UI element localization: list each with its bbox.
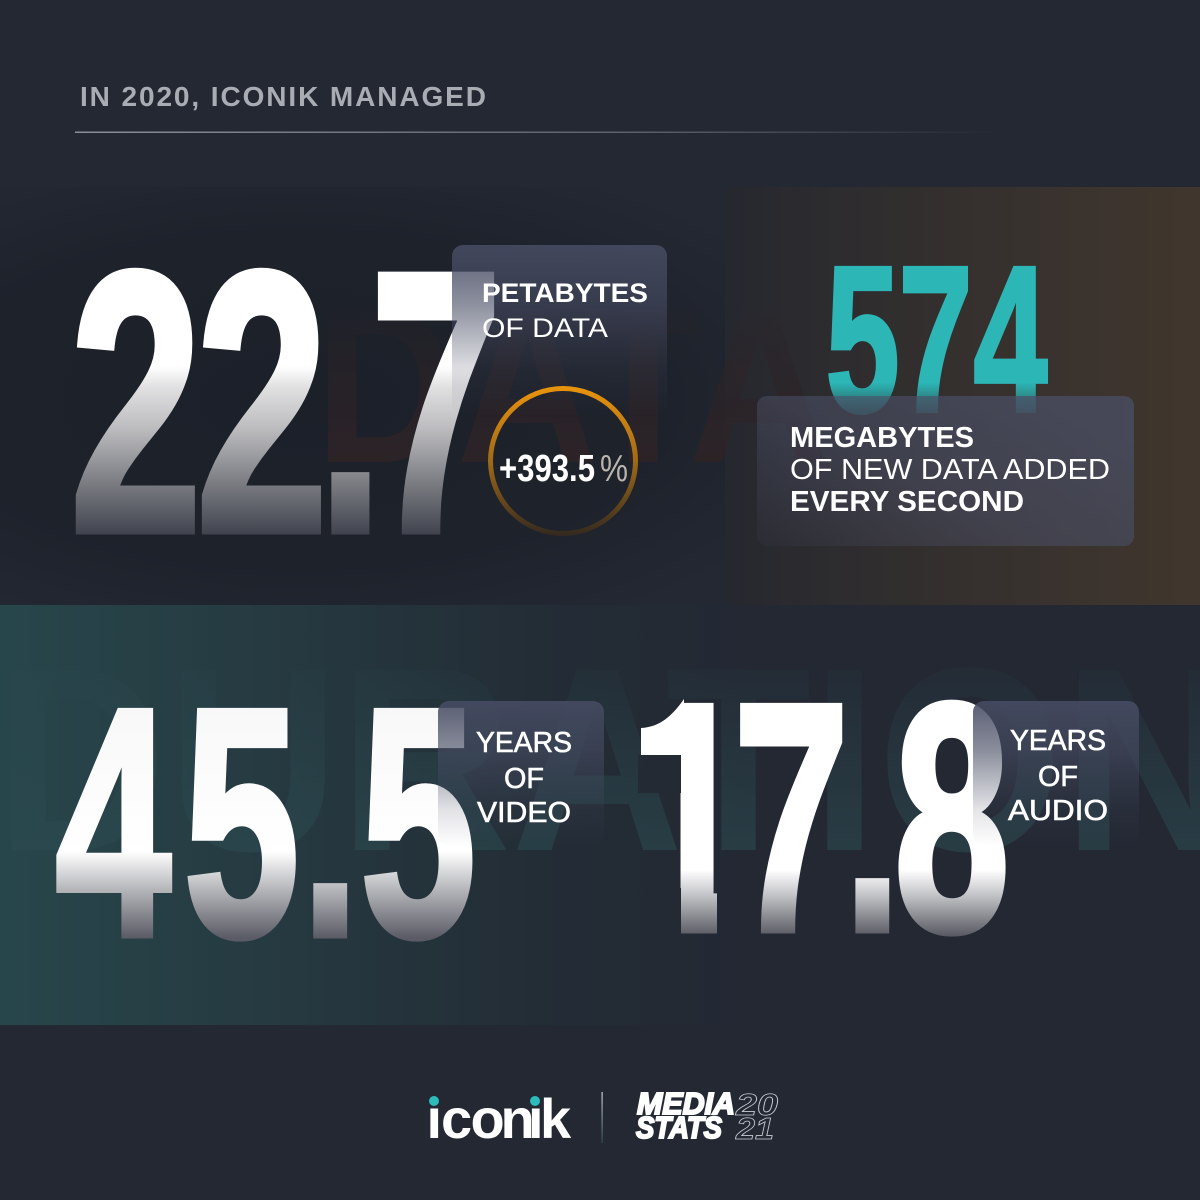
label: megabytes of new data added every second: MEGABYTES	[790, 422, 974, 454]
stat: 17.8 years of audio	[632, 636, 1139, 999]
logo: Media Stats 2021: 20	[735, 1087, 778, 1122]
panel: petabytes label	[452, 245, 667, 415]
label: years of video	[476, 727, 572, 829]
panel: audio label	[973, 701, 1139, 846]
stat: 574 megabytes	[757, 266, 1134, 546]
label: years of video: YEARS	[476, 727, 572, 759]
label: years of video: VIDEO	[477, 797, 571, 829]
value: +393.5: +393.5	[499, 448, 595, 490]
title: IN 2020, ICONIK MANAGED	[80, 81, 486, 112]
label: megabytes of new data added every second: OF NEW DATA ADDED	[790, 454, 1110, 486]
panel: megabytes label	[757, 396, 1134, 546]
panel: duration section background	[0, 605, 760, 1025]
label: years of video: OF	[504, 763, 544, 795]
percent sign: %	[600, 448, 628, 490]
number: 17.8: 17.8	[634, 636, 1010, 999]
panel: data section background	[0, 187, 1200, 605]
number: 45.5: 45.5	[55, 641, 476, 1004]
number: 574: 574	[826, 224, 1047, 456]
label: petabytes of data: OF DATA	[482, 313, 608, 343]
label: petabytes of data	[482, 278, 648, 343]
logo: Media Stats 2021: 21	[735, 1111, 774, 1146]
ring	[490, 388, 636, 534]
panel: video label	[438, 701, 604, 846]
logo: Media Stats 2021: MEDIA	[637, 1086, 735, 1121]
number: 22.7: 22.7	[70, 195, 502, 611]
logo: iconik: iconik	[426, 1087, 572, 1150]
label: years of audio	[1008, 725, 1108, 827]
label: megabytes of new data added every second	[790, 422, 1110, 518]
label: years of audio: OF	[1038, 761, 1078, 793]
watermark: DATA: DATA	[315, 262, 830, 510]
callout: growth ring	[490, 388, 636, 534]
label: petabytes of data: PETABYTES	[482, 278, 648, 308]
logo: Media Stats 2021: STATS	[636, 1110, 722, 1145]
stat: 45.5 years of video	[55, 641, 604, 1004]
label: years of audio: AUDIO	[1008, 795, 1108, 827]
logo: Media Stats 2021	[636, 1086, 778, 1146]
stat: 22.7 petabytes	[70, 195, 667, 611]
label: years of audio: YEARS	[1010, 725, 1106, 757]
label: megabytes of new data added every second: EVERY SECOND	[790, 486, 1024, 518]
